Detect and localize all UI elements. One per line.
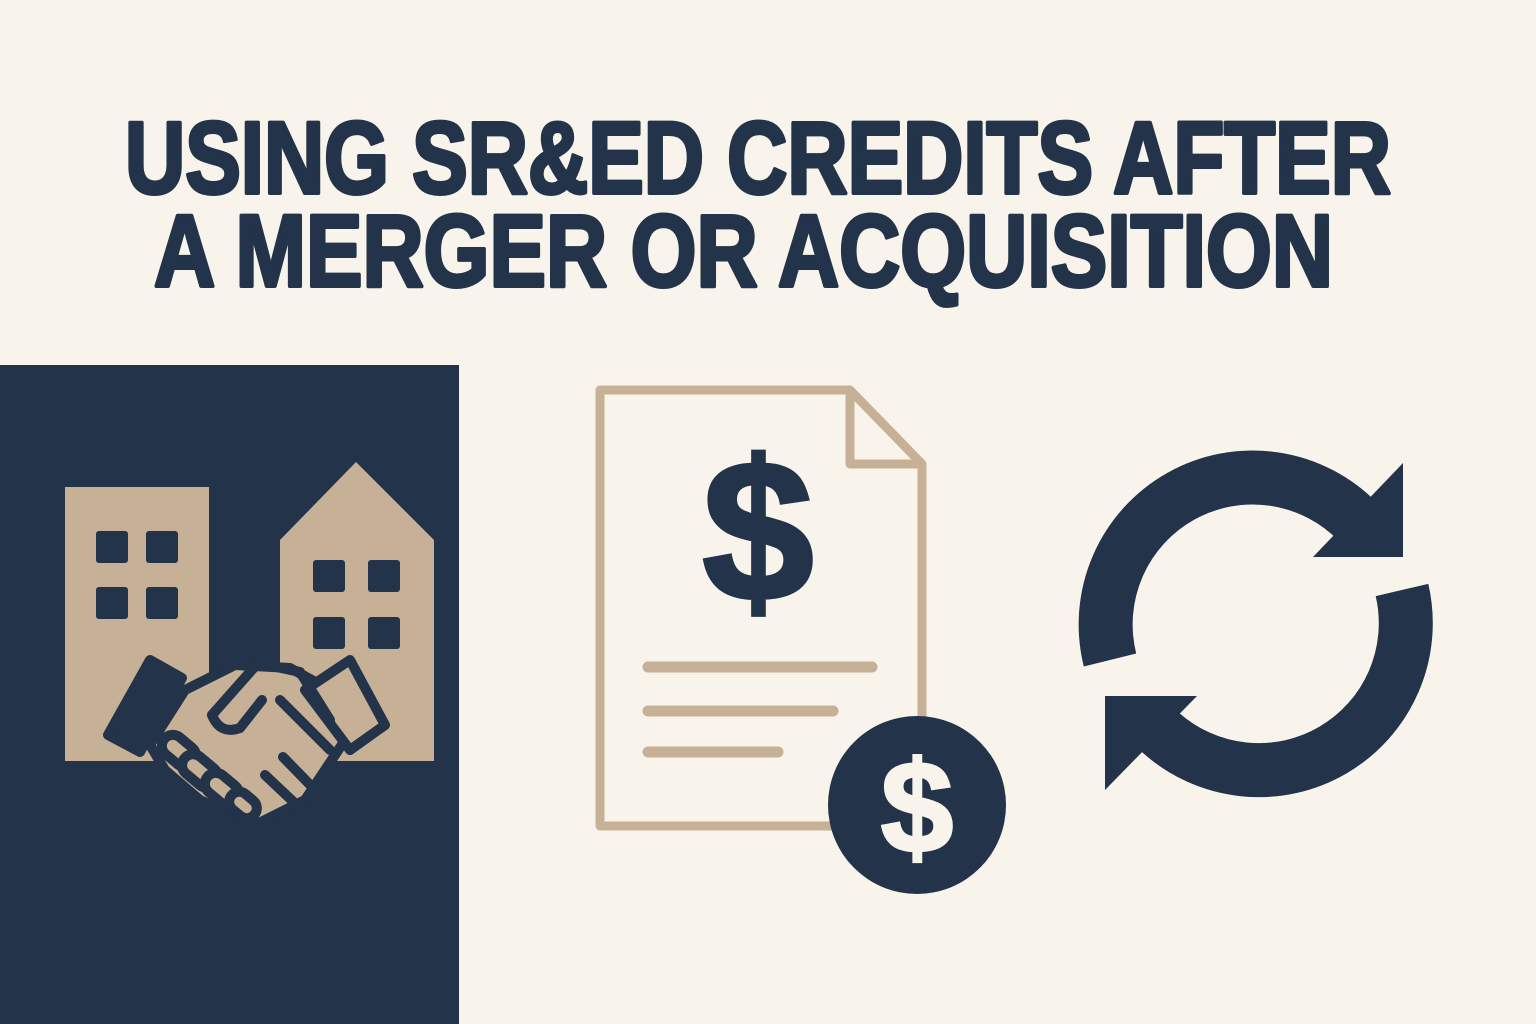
icon: right building: [280, 462, 434, 761]
title: [125, 101, 1391, 308]
icon: coin: $: [881, 734, 953, 880]
text lines: [648, 667, 872, 752]
icon: document with dollar: [600, 390, 922, 826]
icon: handshake: [108, 660, 385, 825]
title: A MERGER OR ACQUISITION: [154, 194, 1333, 308]
icon: refresh arrows: [1105, 463, 1406, 790]
dollar sign: $: [702, 420, 814, 643]
panel: merger navy panel: [0, 365, 459, 1024]
icon: coin: [828, 716, 1006, 894]
icon: left building: [65, 487, 209, 761]
